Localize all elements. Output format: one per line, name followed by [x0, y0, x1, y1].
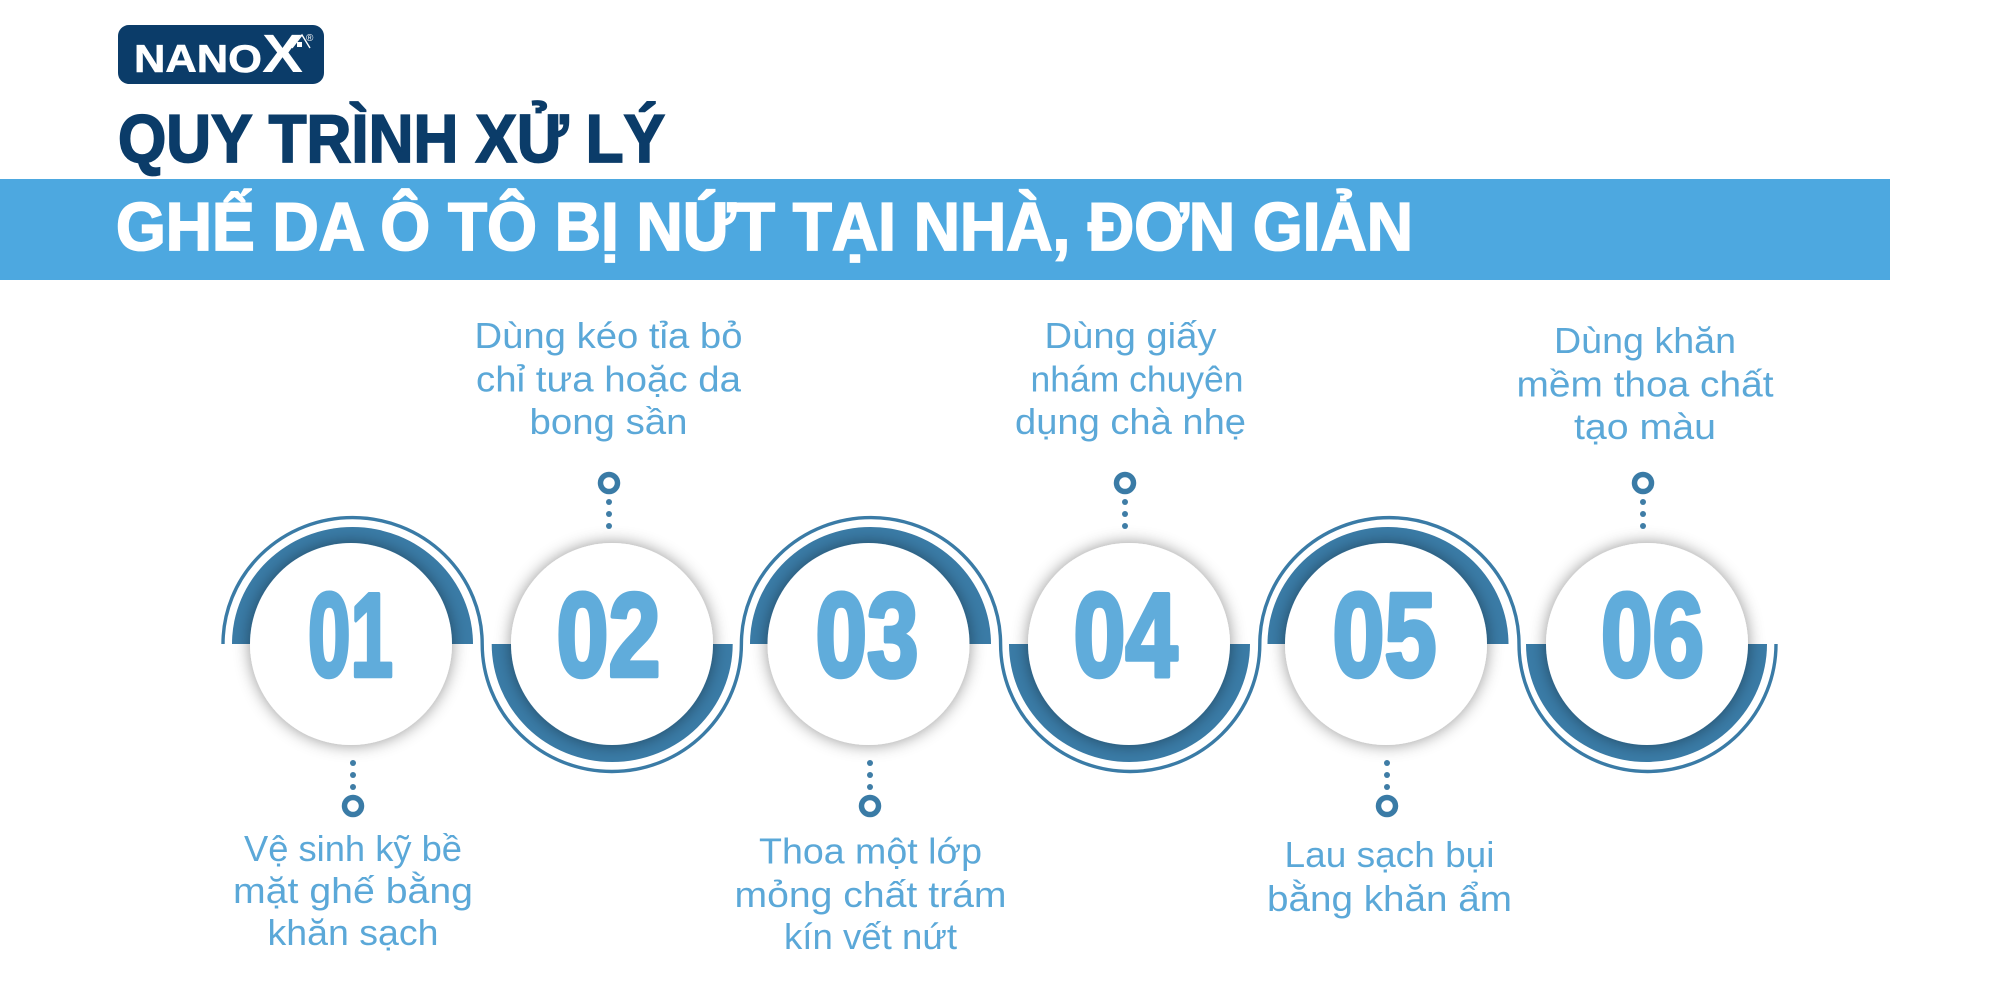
number 06: 06 [1601, 569, 1704, 702]
circle 03 [768, 543, 970, 745]
circle 04 [1028, 543, 1230, 745]
logo: NanoX: ® [306, 33, 314, 44]
text 01: khăn sạch [268, 912, 438, 953]
text 02: chỉ tưa hoặc da [476, 358, 742, 400]
text 03: mỏng chất trám [734, 874, 1006, 915]
number 03: 03 [816, 569, 918, 702]
circle 05 [1285, 543, 1487, 745]
text 05 [1267, 834, 1512, 919]
connector 02 [600, 474, 618, 529]
number 04: 04 [1074, 569, 1178, 702]
step 04 [1009, 315, 1250, 762]
connector 01 [344, 760, 362, 814]
circle 02 [511, 543, 713, 745]
step 03 [734, 527, 1006, 957]
arc 03 [750, 527, 991, 644]
logo: NanoX: X [262, 24, 303, 84]
circle 01 [250, 543, 452, 745]
connector 04 [1116, 474, 1134, 529]
text 03: Thoa một lớp [759, 830, 982, 872]
text 05: bằng khăn ẩm [1267, 878, 1512, 919]
title line 2: GHẾ DA Ô TÔ BỊ NỨT TẠI NHÀ, ĐƠN GIẢN [116, 188, 1413, 265]
circle 06 [1546, 543, 1748, 745]
text 02 [474, 315, 742, 442]
wave line connecting the steps [223, 518, 1776, 772]
step 02 [474, 315, 742, 762]
text 03: kín vết nứt [784, 916, 957, 957]
number 02: 02 [556, 569, 660, 702]
arc 01 [232, 527, 473, 644]
text 04 [1015, 315, 1246, 442]
text 06: tạo màu [1574, 406, 1716, 447]
text 04: nhám chuyên [1030, 358, 1244, 400]
logo: NanoX: NANO [134, 38, 262, 81]
arc 02 [492, 644, 733, 762]
arc 04 [1009, 644, 1250, 762]
step 06 [1516, 320, 1774, 762]
step 01 [232, 527, 473, 953]
text 06: Dùng khăn [1554, 320, 1736, 361]
connector 03 [862, 760, 878, 814]
text 06: mềm thoa chất [1516, 364, 1774, 404]
connector 05 [1378, 760, 1396, 814]
arc 06 [1526, 644, 1767, 762]
text 01 [233, 828, 473, 953]
text 06 [1516, 320, 1774, 447]
text 03 [734, 830, 1006, 957]
text 02: bong sần [530, 401, 688, 442]
step 05 [1267, 527, 1512, 919]
text 01: mặt ghế bằng [233, 870, 473, 911]
text 04: Dùng giấy [1044, 315, 1216, 356]
text 01: Vệ sinh kỹ bề [244, 828, 462, 869]
logo: NanoX [118, 24, 324, 84]
connector 06 [1634, 474, 1652, 529]
title banner [0, 179, 1890, 280]
text 04: dụng chà nhẹ [1015, 401, 1246, 442]
number 05: 05 [1332, 569, 1436, 702]
number 01: 01 [308, 569, 393, 702]
text 05: Lau sạch bụi [1284, 834, 1494, 875]
arc 05 [1268, 527, 1508, 644]
title line 1: QUY TRÌNH XỬ LÝ [118, 100, 665, 177]
text 02: Dùng kéo tỉa bỏ [474, 315, 742, 356]
